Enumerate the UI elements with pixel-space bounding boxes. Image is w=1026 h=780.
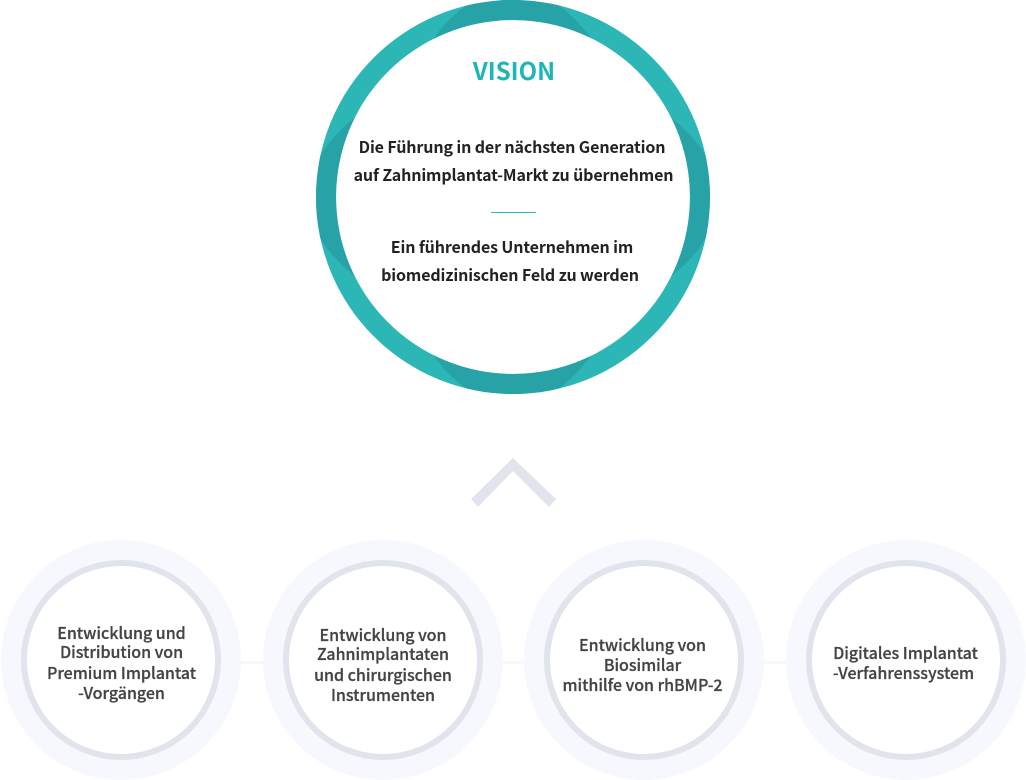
circle: premium implant distribution: -Vorgängen	[78, 680, 165, 704]
text: first vision statement	[354, 134, 673, 186]
text: first vision statement: auf Zahnimplantat-Markt zu übernehmen	[354, 162, 673, 186]
circle: premium implant distribution: Premium Implantat	[47, 660, 197, 684]
connectors between circles	[240, 661, 787, 664]
circle: premium implant distribution	[1, 540, 241, 780]
circle: premium implant distribution: Distribution von	[60, 639, 183, 663]
circle: digital implant system	[786, 540, 1026, 780]
vision circle	[310, 0, 716, 401]
circle: dental implants and surgical instruments: Entwicklung von	[320, 622, 446, 646]
text: second vision statement: Ein führendes Unternehmen im	[391, 234, 633, 258]
circle: biosimilar rhBMP-2: Biosimilar	[604, 652, 682, 676]
circle: dental implants and surgical instruments: Instrumenten	[331, 682, 435, 706]
circle: biosimilar rhBMP-2: mithilfe von rhBMP-2	[562, 672, 723, 696]
circle: premium implant distribution: Entwicklung und	[57, 620, 186, 644]
text: first vision statement: Die Führung in der nächsten Generation	[359, 134, 665, 158]
circle: digital implant system: -Verfahrenssystem	[833, 660, 974, 684]
circle: biosimilar rhBMP-2	[524, 540, 764, 780]
circle: biosimilar rhBMP-2: Entwicklung von	[579, 632, 706, 656]
arrow: upward chevron	[471, 458, 556, 507]
circle: dental implants and surgical instruments	[263, 540, 503, 780]
heading: VISION: VISION	[472, 52, 555, 87]
text: second vision statement: biomedizinischen Feld zu werden	[381, 262, 639, 286]
circle: digital implant system: Digitales Implantat	[833, 640, 979, 664]
circle: dental implants and surgical instruments: Zahnimplantaten	[317, 641, 449, 665]
teal ring	[310, 0, 716, 401]
text: second vision statement	[381, 234, 639, 286]
circle: dental implants and surgical instruments: und chirurgischen	[314, 662, 452, 686]
